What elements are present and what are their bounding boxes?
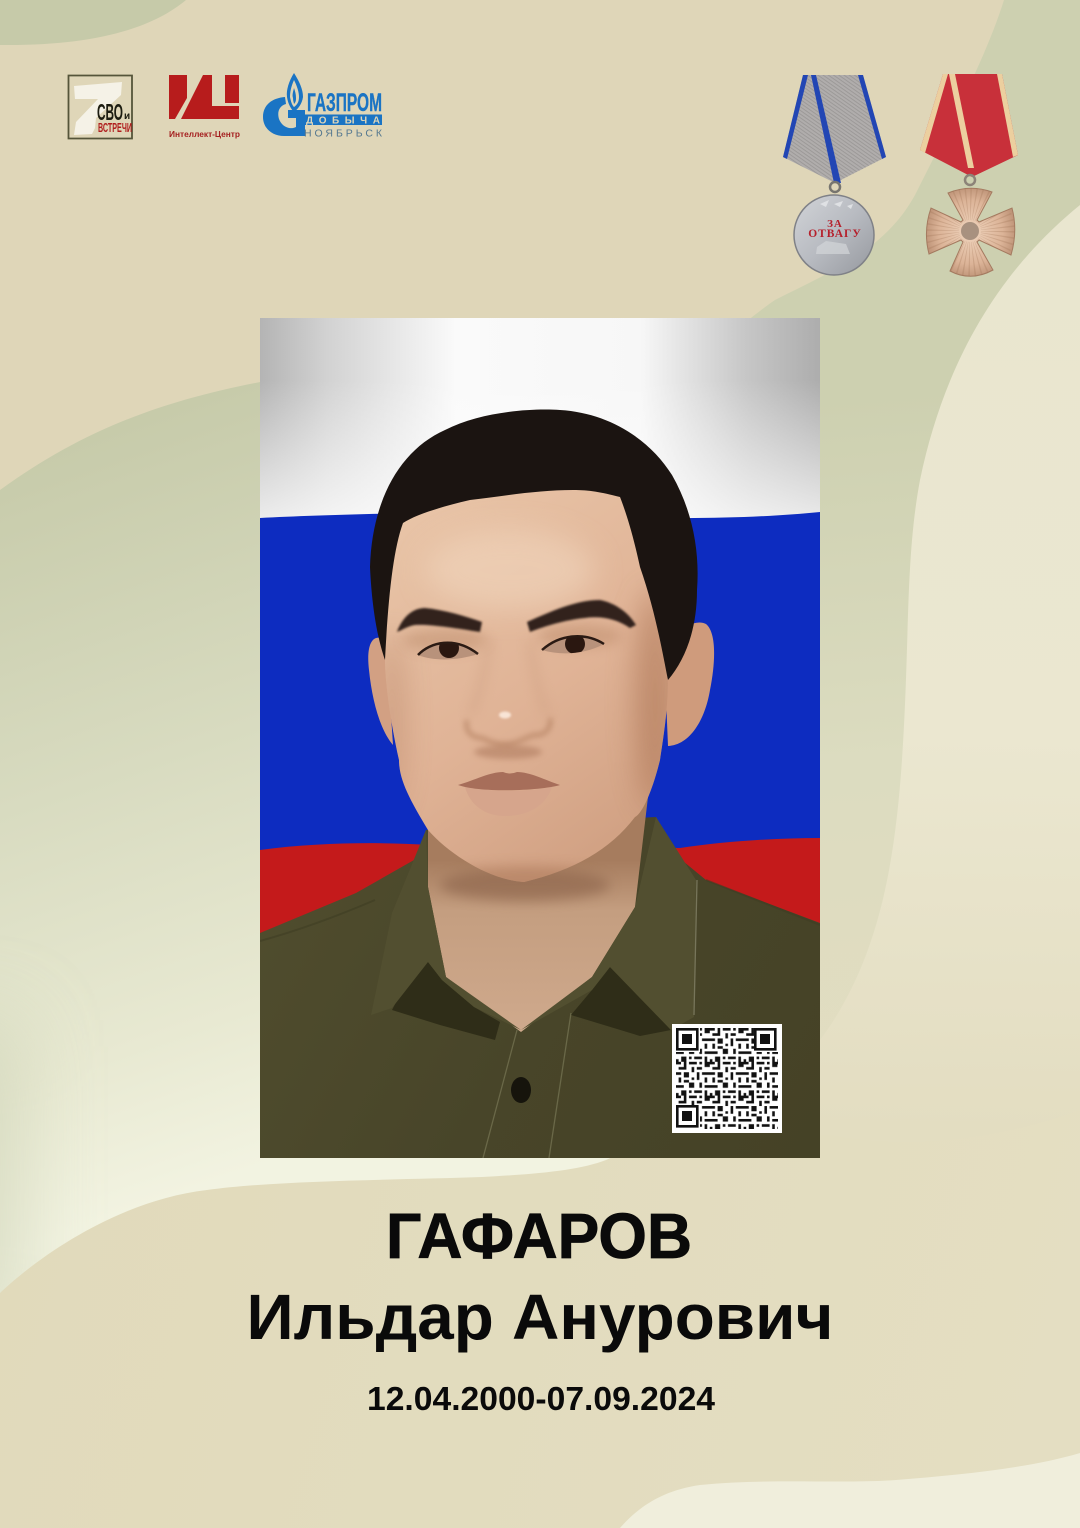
face shading: [380, 530, 675, 894]
collar: [371, 817, 697, 1103]
logo: Интеллект-Центр: Интеллект-Центр: [169, 130, 240, 139]
chin shadow: [440, 869, 610, 901]
face: [385, 490, 668, 882]
eyes: [418, 634, 604, 659]
name: [246, 1200, 834, 1353]
flag: [260, 318, 820, 960]
nose: [466, 640, 550, 759]
medal inscription: ОТВАГУ: [808, 228, 862, 240]
dates: 12.04.2000-07.09.2024: [367, 1380, 716, 1417]
medal inscription: [808, 218, 862, 240]
shirt: [260, 817, 820, 1158]
logo: СВО и встречи: ВСТРЕЧИ: [98, 121, 132, 135]
surname: ГАФАРОВ: [386, 1200, 692, 1272]
logo: Интеллект-Центр: [169, 75, 240, 139]
medal inscription: ЗА: [827, 218, 843, 230]
medal: За отвагу: [783, 75, 886, 275]
eyebrows: [397, 600, 636, 632]
ribbon: [920, 74, 1018, 177]
logo: Газпром добыча Ноябрьск: ДОБЫЧА: [306, 116, 380, 126]
ears: [368, 622, 714, 746]
medal: Орден Мужества: [920, 74, 1018, 276]
given name: Ильдар Анурович: [246, 1281, 834, 1353]
ribbon: [783, 75, 886, 183]
QR code: [672, 1024, 782, 1133]
logo: СВО и встречи: [68, 76, 132, 138]
logos: [68, 73, 383, 140]
cross: [926, 188, 1015, 276]
logo: СВО и встречи: и: [124, 111, 130, 122]
logo: Газпром добыча Ноябрьск: [263, 73, 383, 140]
logo: Газпром добыча Ноябрьск: НОЯБРЬСК: [304, 128, 383, 140]
logo: СВО и встречи: СВО: [97, 99, 123, 125]
logo: Газпром добыча Ноябрьск: ГАЗПРОМ: [307, 89, 382, 117]
hair: [370, 410, 698, 680]
neck: [428, 780, 650, 1032]
lips: [458, 772, 560, 802]
photo: [260, 318, 820, 1158]
